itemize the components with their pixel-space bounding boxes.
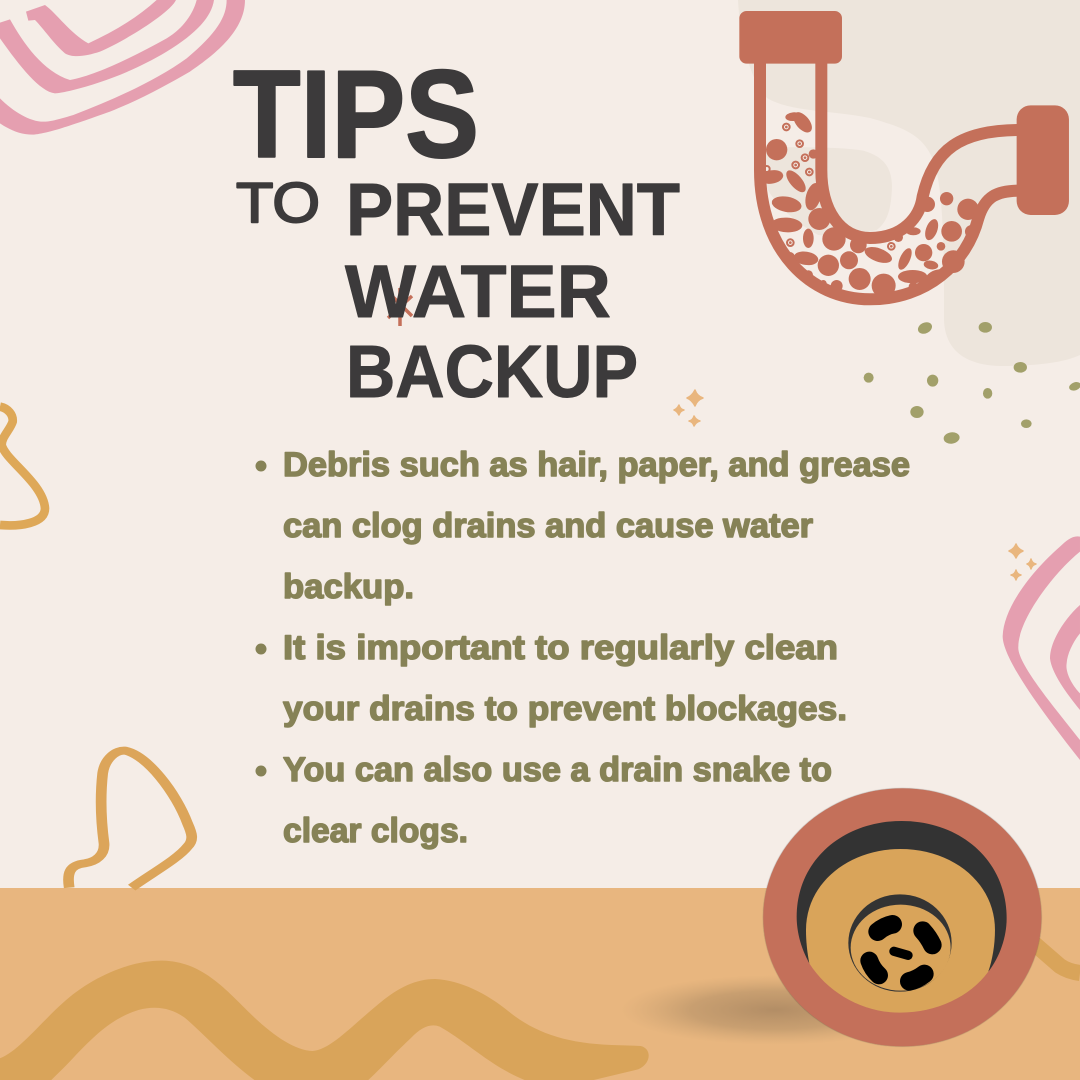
title: TIPS (233, 46, 479, 184)
strainer slots (869, 924, 932, 981)
tip 3: clear clogs. (283, 812, 468, 850)
title: BACKUP (346, 330, 638, 413)
sparkles right (1009, 544, 1036, 580)
tip 2: It is important to regularly clean (283, 629, 838, 667)
right flange (1017, 105, 1069, 215)
bullet list (256, 446, 910, 850)
ground band (0, 888, 1080, 1080)
sparkles near title (674, 390, 703, 426)
icon: clogged pipe (739, 11, 1069, 299)
icon: floor drain (763, 788, 1041, 1046)
tip 3 (256, 751, 832, 850)
title: TO (236, 171, 320, 235)
tip 2 (256, 629, 847, 728)
tip 1: Debris such as hair, paper, and grease (283, 446, 910, 484)
top flange (739, 11, 842, 64)
pipe walls (760, 60, 1020, 299)
title: PREVENT (346, 168, 680, 251)
strainer (848, 894, 952, 992)
red spark behind title (388, 288, 412, 326)
drain basin (806, 849, 995, 1013)
background blob behind pipe (738, 0, 1080, 366)
tan loop left (0, 407, 45, 525)
wave on ground (0, 961, 649, 1080)
title (233, 46, 680, 413)
title: WATER (345, 250, 611, 333)
drain rim (763, 788, 1041, 1046)
tip 2: your drains to prevent blockages. (283, 690, 847, 728)
drain hole shadow (797, 821, 1007, 972)
pipe debris (759, 109, 979, 298)
tip 1: backup. (283, 568, 414, 606)
dots (864, 320, 1080, 445)
wave tail right of drain (1030, 940, 1080, 973)
tip 1: can clog drains and cause water (283, 507, 813, 545)
drain shadow (620, 975, 930, 1045)
tan loop lower left (68, 751, 192, 888)
pink squiggle right (1003, 536, 1080, 760)
tip 1 (256, 446, 910, 606)
tip 3: You can also use a drain snake to (283, 751, 832, 789)
pink squiggle top left (0, 0, 245, 135)
